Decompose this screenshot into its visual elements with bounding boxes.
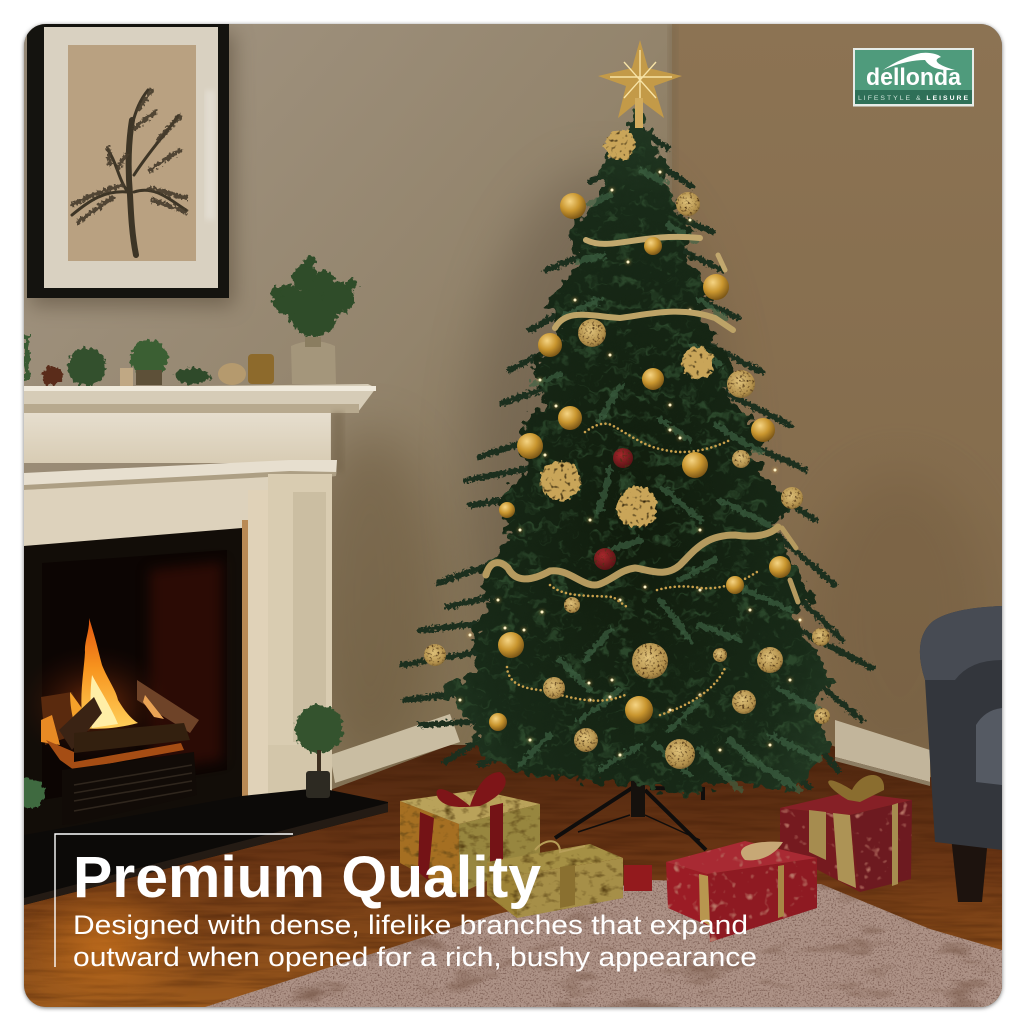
drawn tree in picture: [72, 90, 186, 255]
fairy lights: [458, 170, 802, 756]
logo tagline: LIFESTYLE & LEISURE: [858, 95, 968, 102]
mantel decorations: [24, 256, 358, 386]
rug: [205, 880, 1002, 1007]
front logs: [59, 697, 102, 750]
star topper: [598, 40, 682, 128]
small plants on hearth: [15, 705, 343, 808]
christmas tree: [402, 40, 872, 850]
fireplace: [15, 384, 376, 840]
embers: [46, 740, 184, 770]
hearth: [24, 788, 388, 905]
tree stand: [555, 770, 706, 850]
lace snowflake ornaments: [540, 130, 714, 527]
armchair: [920, 606, 1002, 902]
lit branches: [520, 170, 820, 790]
logo wordmark: dellonda: [866, 64, 962, 91]
description text: Designed with dense, lifelike branches that expand: [73, 910, 748, 940]
grate: [72, 752, 194, 770]
red ornaments: [594, 448, 633, 570]
gift: red box right: [780, 775, 912, 892]
gift: gold box centre: [487, 841, 623, 918]
logs: [41, 692, 90, 745]
gift boxes: [400, 772, 912, 942]
bead garlands: [507, 424, 760, 715]
heading: Premium Quality: [73, 845, 541, 910]
tree foliage: [440, 105, 834, 795]
molding: [24, 460, 337, 490]
description text: [73, 910, 757, 972]
figurines: [218, 363, 246, 385]
description text: outward when opened for a rich, bushy appearance: [73, 942, 757, 972]
gold ball ornaments: [489, 193, 791, 731]
column: [242, 520, 248, 796]
topiary balls: [68, 348, 106, 386]
ribbons: [486, 237, 798, 602]
gift: red box centre: [666, 841, 817, 942]
shadow branches reaching to the tips: [402, 130, 872, 788]
glitter ornaments: [424, 192, 830, 769]
baseboards: [330, 714, 930, 786]
flames: [81, 618, 138, 729]
firebox: [24, 528, 242, 840]
logo wave: [883, 53, 955, 70]
framed picture: [27, 24, 234, 306]
caption bracket: [55, 834, 293, 967]
small red gift: [624, 865, 652, 891]
logo badge: [853, 48, 974, 106]
picture art: [68, 45, 196, 261]
potted plant: [270, 256, 358, 337]
gift: gold box left: [400, 772, 540, 894]
mantel shelf: [24, 384, 374, 410]
